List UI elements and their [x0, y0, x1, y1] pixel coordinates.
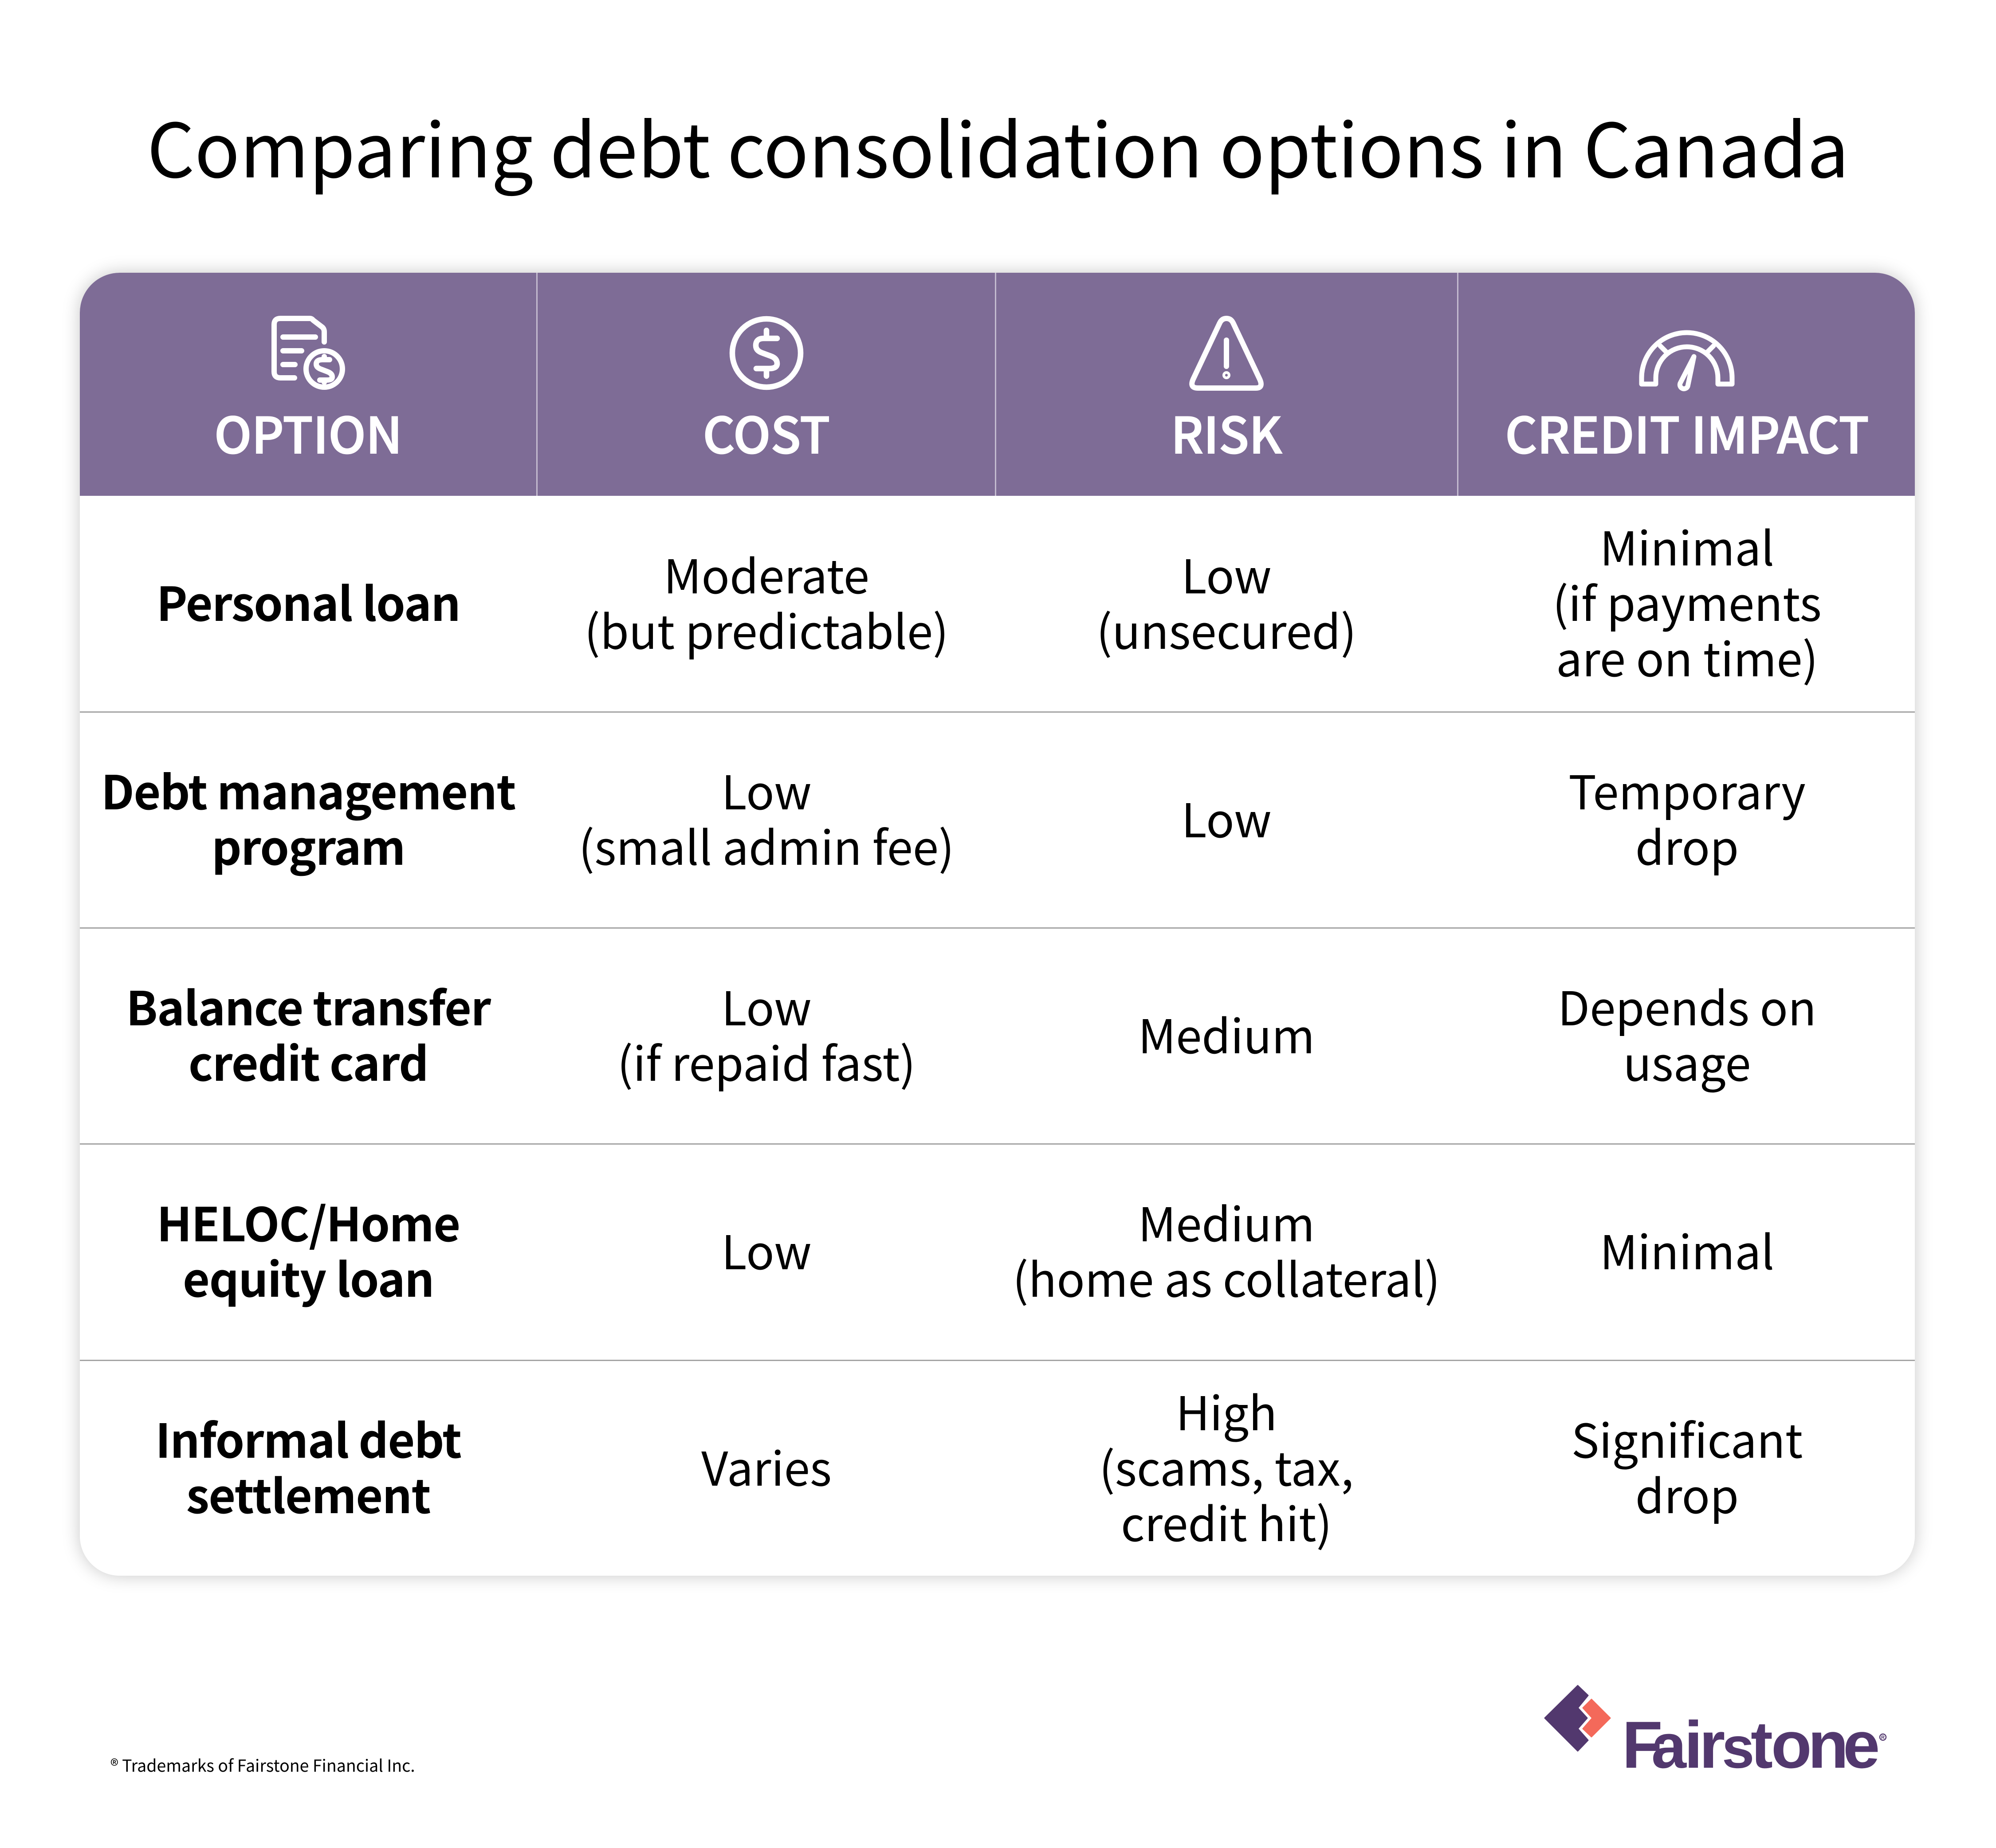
logo: Fairstone [1545, 1686, 1886, 1782]
risk value: Low [1181, 783, 1272, 851]
risk value: High [1176, 1377, 1277, 1444]
credit impact value [1459, 707, 1915, 927]
credit impact value: usage [1623, 1027, 1751, 1095]
logo wordmark: t [1751, 1707, 1773, 1782]
option name [80, 1139, 537, 1359]
option name: Balance transfer [126, 972, 491, 1039]
risk value: Low [1181, 539, 1272, 607]
option name: credit card [189, 1027, 428, 1095]
logo mark: purple [1545, 1686, 1588, 1751]
row: balance transfer credit card [80, 927, 1915, 1143]
credit impact value [1459, 490, 1915, 712]
risk value: (unsecured) [1096, 595, 1356, 663]
table header [80, 273, 1915, 496]
cost value [537, 490, 996, 712]
icon: dollar coin [732, 319, 801, 387]
risk value: Medium [1138, 1188, 1315, 1255]
header: cost: COST [703, 396, 830, 468]
header: credit impact: CREDIT IMPACT [1505, 396, 1869, 468]
option name: HELOC/Home [157, 1188, 460, 1255]
risk value [995, 490, 1458, 712]
option name [80, 1356, 537, 1576]
option name: settlement [186, 1460, 430, 1527]
row: informal debt settlement [80, 1360, 1915, 1576]
logo wordmark: F [1622, 1707, 1663, 1782]
credit impact value: Depends on [1558, 972, 1816, 1039]
header: risk: RISK [1171, 396, 1282, 468]
credit impact value: (if payments [1552, 567, 1822, 635]
cost value: Low [721, 756, 812, 823]
credit impact value: Minimal [1600, 512, 1774, 579]
option name: equity loan [183, 1243, 434, 1310]
row: personal loan [80, 496, 1915, 712]
cost value [537, 707, 996, 927]
cost value: Moderate [664, 539, 869, 607]
cost value: Low [721, 1215, 812, 1283]
cost value: Varies [701, 1432, 832, 1499]
logo wordmark: n [1808, 1707, 1849, 1782]
option name: Debt management [101, 756, 515, 823]
option name [80, 923, 537, 1143]
option name [80, 707, 537, 927]
credit impact value: Temporary [1568, 756, 1806, 823]
credit impact value: are on time) [1556, 623, 1818, 690]
risk value: (scams, tax, [1099, 1432, 1354, 1499]
risk value: (home as collateral) [1013, 1243, 1440, 1310]
cost value: (small admin fee) [579, 811, 954, 879]
logo wordmark: o [1771, 1707, 1812, 1782]
risk value: Medium [1138, 1000, 1315, 1067]
row: HELOC/home equity loan [80, 1143, 1915, 1359]
logo mark: coral [1583, 1699, 1610, 1737]
cost value: (if repaid fast) [617, 1027, 915, 1095]
option name: program [212, 811, 405, 879]
option name: Informal debt [155, 1404, 461, 1471]
credit impact value: Significant [1572, 1404, 1803, 1471]
credit impact value: Minimal [1600, 1215, 1774, 1283]
risk value [995, 1139, 1458, 1359]
risk value: credit hit) [1121, 1487, 1332, 1555]
logo wordmark: r [1699, 1707, 1725, 1782]
title: Comparing debt consolidation options in Canada [147, 91, 1849, 199]
credit impact value [1459, 923, 1915, 1143]
option name: Personal loan [157, 567, 460, 635]
cost value: (but predictable) [585, 595, 948, 663]
icon: credit gauge [1642, 333, 1732, 389]
logo registered mark [1880, 1734, 1886, 1740]
header: option: OPTION [214, 396, 402, 468]
risk value [995, 1356, 1458, 1576]
logo registered mark: R [1881, 1735, 1885, 1740]
logo wordmark: s [1722, 1715, 1754, 1780]
comparison table [80, 273, 1915, 1576]
credit impact value [1459, 1356, 1915, 1576]
credit impact value: drop [1635, 811, 1739, 879]
row: debt management program [80, 711, 1915, 927]
credit impact value: drop [1635, 1460, 1739, 1527]
logo wordmark: e [1843, 1707, 1880, 1782]
logo wordmark: i [1684, 1707, 1703, 1782]
cost value: Low [721, 972, 812, 1039]
cost value [537, 923, 996, 1143]
icon: warning triangle [1192, 318, 1261, 388]
footnote: ® Trademarks of Fairstone Financial Inc. [110, 1752, 415, 1777]
icon: document with dollar [274, 318, 342, 387]
logo wordmark: a [1651, 1711, 1687, 1781]
